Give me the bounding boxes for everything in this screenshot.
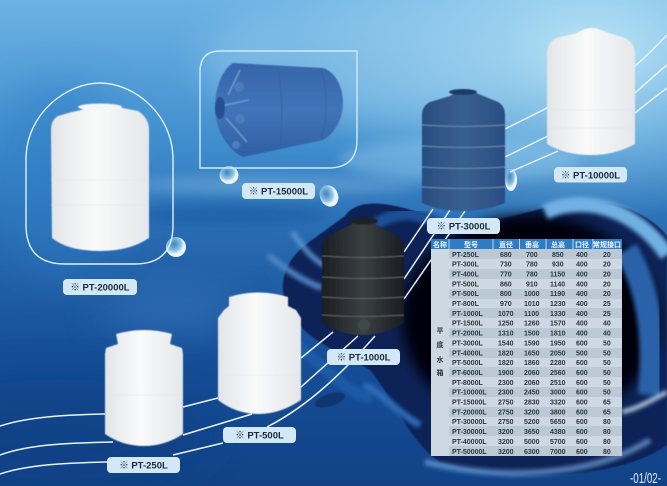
- table product name column: 底: [436, 340, 444, 349]
- table rows: 1330: [550, 311, 566, 318]
- table rows: PT-300L: [452, 262, 480, 269]
- table header: [431, 239, 622, 249]
- table rows: 40: [603, 331, 611, 338]
- table rows: 2050: [550, 350, 566, 357]
- table product name column: 箱: [436, 368, 444, 377]
- table rows: 600: [576, 439, 588, 446]
- table rows: PT-800L: [452, 301, 480, 308]
- table rows: 600: [576, 370, 588, 377]
- table rows: 80: [603, 429, 611, 436]
- table rows: 770: [500, 272, 512, 278]
- table rows: PT-2000L: [452, 331, 483, 338]
- table rows: 3200: [498, 449, 514, 456]
- frame: PT-20000L: [26, 83, 173, 264]
- table rows: PT-20000L: [452, 409, 487, 416]
- label: PT-250L: [107, 457, 180, 473]
- table rows: 2750: [498, 400, 514, 406]
- table rows: 1820: [498, 350, 514, 357]
- table rows: 5000: [524, 439, 540, 446]
- table rows: 2280: [550, 360, 566, 367]
- table rows: 850: [552, 252, 564, 259]
- table rows: 2510: [550, 380, 566, 387]
- table rows: 20: [603, 262, 611, 269]
- table rows: 5200: [524, 419, 540, 426]
- splash basin: [268, 201, 667, 475]
- label: PT-500L: ※ PT-500L: [235, 430, 284, 442]
- table rows: PT-10000L: [452, 390, 487, 397]
- table rows: 1810: [550, 331, 566, 338]
- table rows: 25: [603, 311, 611, 318]
- table rows: PT-5000L: [452, 360, 483, 367]
- label: PT-20000L: [63, 279, 137, 295]
- table rows: 65: [603, 409, 611, 416]
- table rows: 1150: [550, 272, 565, 278]
- tank: PT-15000L: [215, 63, 343, 157]
- table rows: PT-30000L: [452, 419, 487, 426]
- table rows: 600: [576, 429, 588, 436]
- table rows: 2060: [524, 370, 540, 377]
- table rows: 400: [576, 321, 588, 328]
- table rows: PT-500L: [452, 281, 480, 288]
- table rows: 5650: [550, 419, 566, 426]
- table rows: 930: [552, 262, 564, 269]
- table rows: 600: [576, 449, 588, 456]
- table rows: 700: [526, 252, 538, 259]
- table rows: PT-1500L: [452, 321, 483, 328]
- table rows: 25: [603, 301, 611, 308]
- table rows: 1820: [498, 360, 514, 367]
- tank: PT-10000L: [547, 28, 635, 155]
- table rows: 400: [576, 311, 588, 318]
- table rows: 80: [603, 439, 611, 446]
- label: PT-3000L: ※ PT-3000L: [437, 222, 491, 232]
- tank: PT-3000L: [422, 89, 505, 211]
- table rows: 1250: [498, 321, 514, 328]
- table rows: 65: [603, 400, 611, 406]
- table rows: 40: [603, 321, 611, 328]
- table rows: PT-500L: [452, 291, 480, 298]
- tank: PT-250L: [105, 330, 183, 446]
- table rows: PT-50000L: [452, 449, 487, 456]
- table header: 直径: [499, 240, 513, 249]
- table rows: 50: [603, 360, 611, 367]
- table rows: 3800: [550, 409, 566, 416]
- frame: PT-15000L: [200, 51, 357, 168]
- table rows: 600: [576, 400, 588, 406]
- table rows: 400: [576, 252, 588, 259]
- table rows: 600: [576, 390, 588, 397]
- label: PT-20000L: ※ PT-20000L: [70, 282, 130, 294]
- table rows: 1540: [498, 340, 514, 347]
- table rows: 600: [576, 380, 588, 387]
- table rows: 5700: [550, 439, 566, 446]
- table header: 常规接口: [593, 240, 621, 249]
- table header: 型号: [464, 240, 478, 249]
- label: PT-15000L: [242, 183, 315, 199]
- label: PT-250L: ※ PT-250L: [119, 460, 168, 472]
- table rows: 1950: [550, 340, 566, 347]
- table rows: 1650: [524, 350, 540, 357]
- table rows: 1860: [524, 360, 540, 367]
- table rows: 1010: [524, 301, 540, 308]
- label: PT-15000L: ※ PT-15000L: [249, 186, 308, 198]
- table rows: 1900: [498, 370, 514, 377]
- table rows: 400: [576, 272, 588, 278]
- table rows: 400: [576, 262, 588, 269]
- tank: PT-1000L: [322, 218, 404, 335]
- specification table: [431, 239, 622, 456]
- table header: 总高: [551, 240, 565, 249]
- label: PT-3000L: [427, 218, 500, 234]
- table header: 名称: [433, 240, 447, 249]
- table rows: 3000: [550, 390, 566, 397]
- table rows: 1590: [524, 340, 540, 347]
- table product name column: 水: [436, 355, 444, 364]
- table rows: 3200: [498, 429, 514, 436]
- table rows: 860: [500, 281, 512, 288]
- table rows: 3320: [550, 400, 566, 406]
- table rows: 780: [526, 272, 538, 278]
- table rows: PT-40000L: [452, 439, 487, 446]
- table rows: PT-8000L: [452, 380, 483, 387]
- table rows: 780: [526, 262, 538, 269]
- table rows: 1100: [524, 311, 539, 318]
- table rows: 500: [576, 350, 588, 357]
- table rows: 600: [576, 340, 588, 347]
- label: PT-500L: [223, 427, 296, 443]
- label: PT-1000L: [327, 349, 400, 365]
- table rows: 4380: [550, 429, 566, 436]
- table rows: 1140: [550, 281, 565, 288]
- table rows: 1500: [524, 331, 540, 338]
- table rows: 1260: [524, 321, 540, 328]
- table rows: PT-30000L: [452, 429, 487, 436]
- table rows: [452, 252, 611, 456]
- table rows: 6300: [524, 449, 540, 456]
- table rows: 2750: [498, 409, 514, 416]
- label: PT-1000L: ※ PT-1000L: [337, 352, 391, 364]
- table product name column: 平: [436, 327, 444, 335]
- label: PT-10000L: ※ PT-10000L: [561, 170, 620, 182]
- table rows: 400: [576, 301, 588, 308]
- table row stripes: [449, 249, 622, 456]
- table header: 垂高: [525, 240, 539, 249]
- table rows: 2450: [524, 390, 540, 397]
- table rows: 1190: [550, 291, 565, 298]
- table rows: 910: [526, 281, 538, 288]
- table rows: 20: [603, 291, 611, 298]
- table rows: 50: [603, 390, 611, 397]
- table rows: PT-15000L: [452, 400, 487, 406]
- table rows: 80: [603, 449, 611, 456]
- table rows: PT-3000L: [452, 340, 483, 347]
- table rows: 600: [576, 360, 588, 367]
- table rows: 970: [500, 301, 512, 308]
- table rows: 3200: [498, 439, 514, 446]
- label: PT-10000L: [554, 167, 627, 182]
- table rows: 2300: [498, 390, 514, 397]
- table rows: 1070: [498, 311, 514, 318]
- table rows: 400: [576, 291, 588, 298]
- table rows: 50: [603, 350, 611, 357]
- table rows: 7000: [550, 449, 566, 456]
- tank: PT-500L: [218, 292, 301, 414]
- table rows: 400: [576, 331, 588, 338]
- table rows: 50: [603, 370, 611, 377]
- table rows: PT-6000L: [452, 370, 483, 377]
- table rows: 1230: [550, 301, 566, 308]
- water drops: [166, 166, 517, 257]
- table header: 口径: [575, 240, 589, 249]
- table rows: 1000: [524, 291, 540, 298]
- table rows: 20: [603, 281, 611, 288]
- table rows: 400: [576, 281, 588, 288]
- table rows: 3650: [524, 429, 540, 436]
- table rows: 600: [576, 409, 588, 416]
- table rows: 600: [576, 419, 588, 426]
- table rows: 2750: [498, 419, 514, 426]
- table rows: 680: [500, 252, 512, 259]
- table rows: PT-4000L: [452, 350, 483, 357]
- table rows: PT-1000L: [452, 311, 483, 318]
- table rows: 800: [500, 291, 512, 298]
- table rows: 20: [603, 252, 611, 259]
- table rows: 3200: [524, 409, 540, 416]
- table rows: 20: [603, 272, 611, 278]
- table rows: 50: [603, 340, 611, 347]
- table rows: PT-250L: [452, 252, 480, 259]
- table rows: 2300: [498, 380, 514, 387]
- table rows: PT-400L: [452, 272, 480, 278]
- table rows: 1570: [550, 321, 566, 328]
- table rows: 2060: [524, 380, 540, 387]
- table rows: 1310: [498, 331, 514, 338]
- table rows: 80: [603, 419, 611, 426]
- table rows: 730: [500, 262, 512, 269]
- table rows: 2830: [524, 400, 540, 406]
- table rows: 2560: [550, 370, 566, 377]
- table rows: 50: [603, 380, 611, 387]
- tank: PT-20000L: [51, 104, 149, 251]
